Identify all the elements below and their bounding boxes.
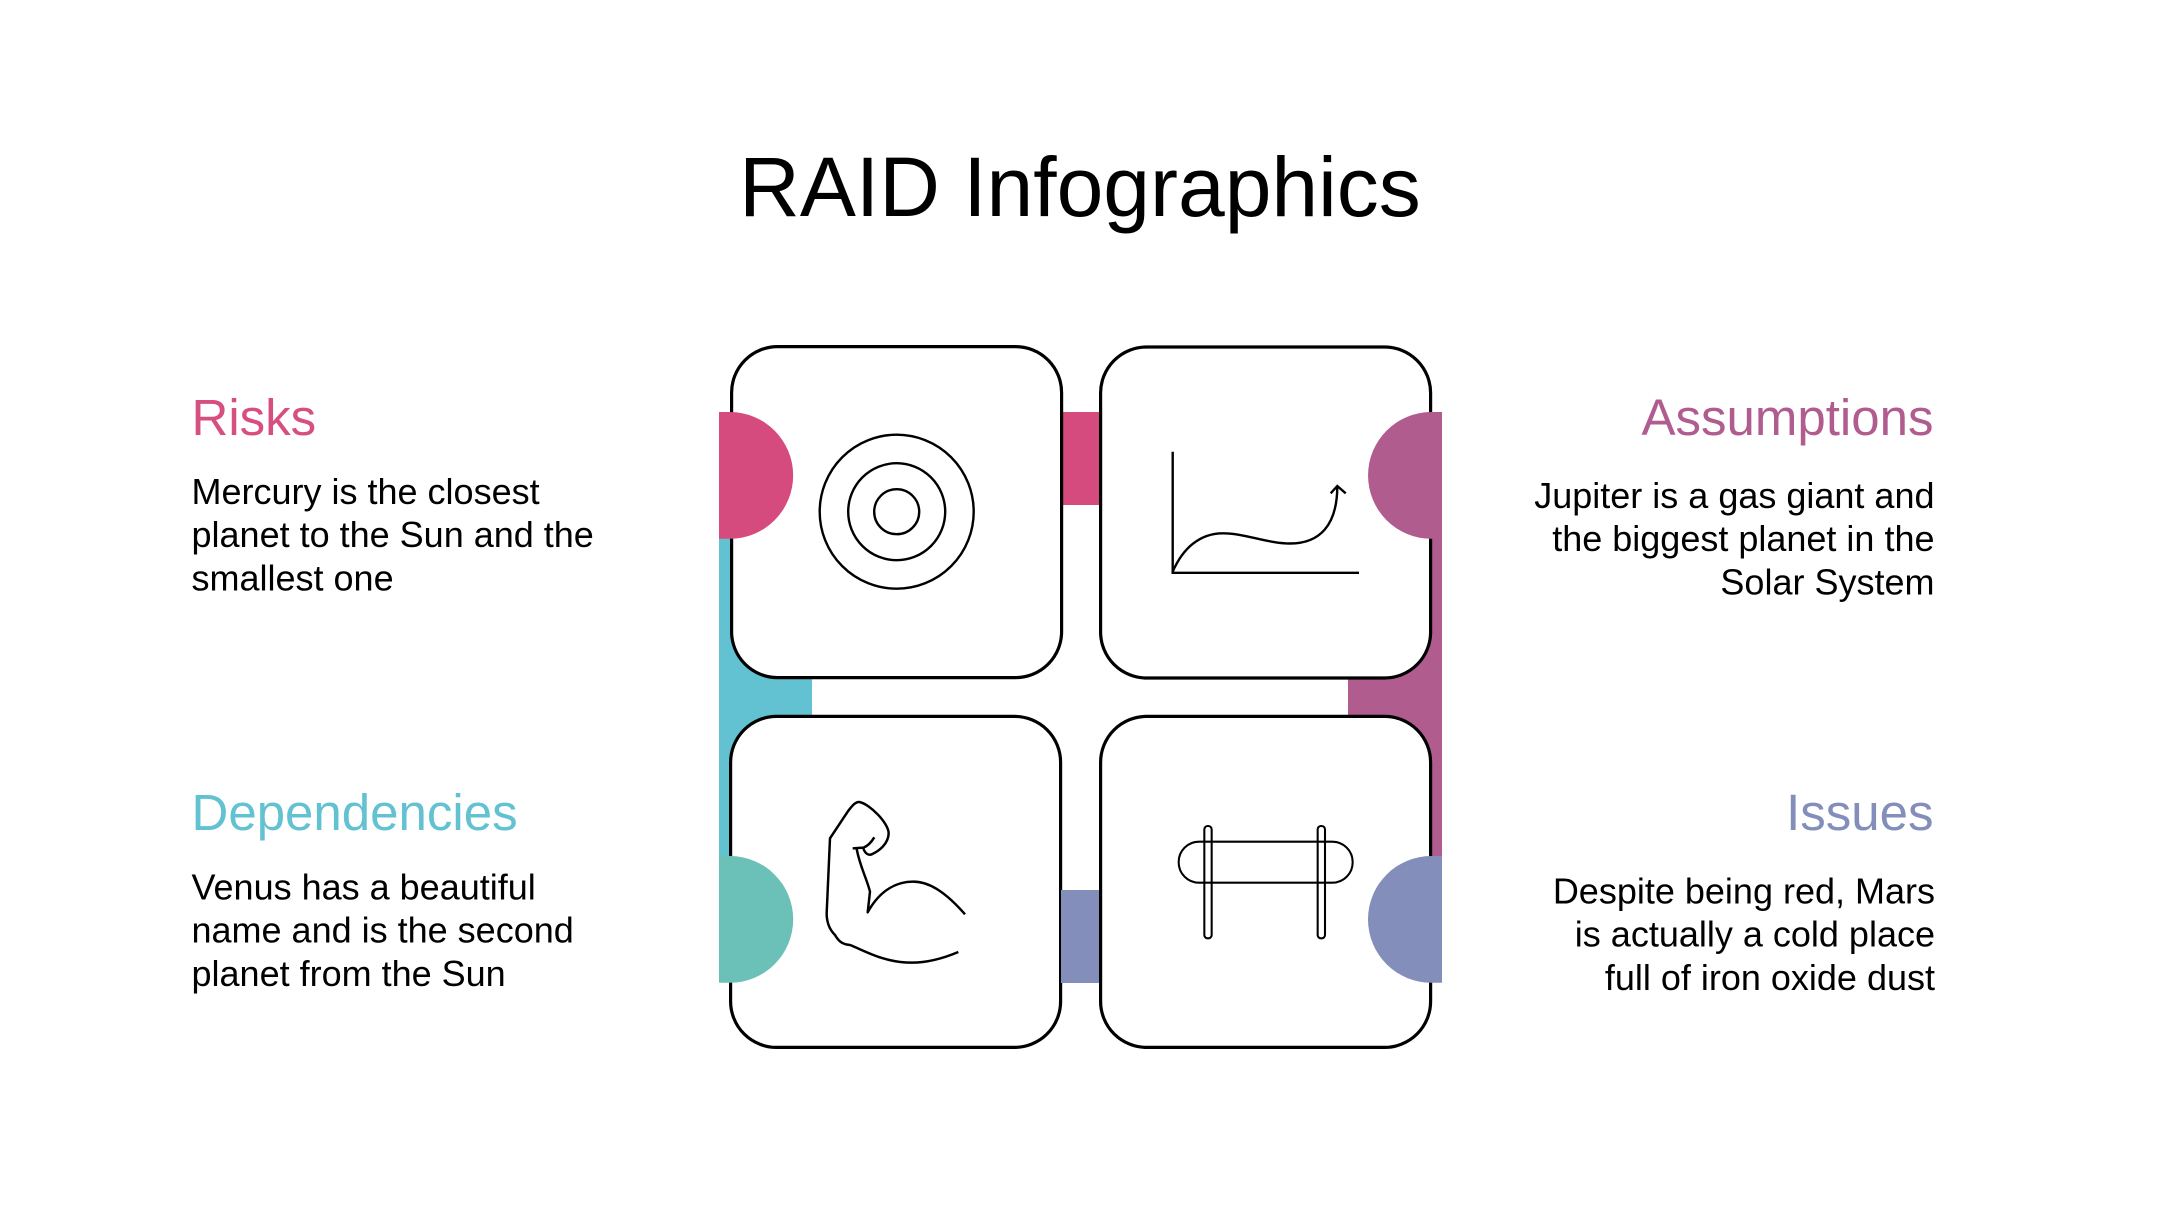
heading: issues: Issues (1786, 784, 1934, 841)
tab: dependencies half circle (719, 856, 793, 983)
connector: risks bar (1055, 412, 1105, 505)
heading: risks: Risks (192, 389, 316, 446)
body: issues: Despite being red, Mars (1553, 870, 1935, 912)
text block: risks (192, 389, 594, 598)
body: dependencies: planet from the Sun (192, 953, 506, 994)
connector: issues bar (1061, 890, 1105, 983)
panel: dependencies icon box (731, 716, 1061, 1047)
icon: barbell (1179, 826, 1353, 938)
body: assumptions: Jupiter is a gas giant and (1534, 475, 1934, 516)
connector: dependencies band (719, 530, 812, 860)
connector: assumptions band (1348, 530, 1442, 860)
heading: dependencies: Dependencies (192, 784, 518, 841)
icon: flexed arm (827, 802, 965, 963)
tab: issues half circle (1368, 856, 1442, 983)
body: assumptions: the biggest planet in the (1552, 518, 1934, 559)
icon: growth chart (1173, 452, 1359, 573)
text block: dependencies (192, 784, 574, 994)
heading: assumptions: Assumptions (1642, 389, 1934, 446)
icon: target (820, 435, 974, 589)
body: issues: full of iron oxide dust (1605, 957, 1935, 998)
body: assumptions: Solar System (1720, 562, 1934, 602)
panel: issues icon box (1101, 716, 1431, 1047)
text block: assumptions (1534, 389, 1934, 602)
tab: assumptions half circle (1368, 412, 1442, 539)
title: RAID Infographics (739, 140, 1421, 234)
body: risks: Mercury is the closest (192, 471, 540, 512)
tab: risks half circle (719, 412, 793, 539)
panel: assumptions icon box (1101, 347, 1431, 678)
body: issues: is actually a cold place (1575, 914, 1935, 954)
body: dependencies: Venus has a beautiful (192, 866, 536, 908)
body: risks: planet to the Sun and the (192, 514, 594, 555)
body: dependencies: name and is the second (192, 910, 574, 950)
text block: issues (1553, 784, 1935, 998)
body: risks: smallest one (192, 558, 394, 598)
panel: risks icon box (732, 347, 1062, 678)
